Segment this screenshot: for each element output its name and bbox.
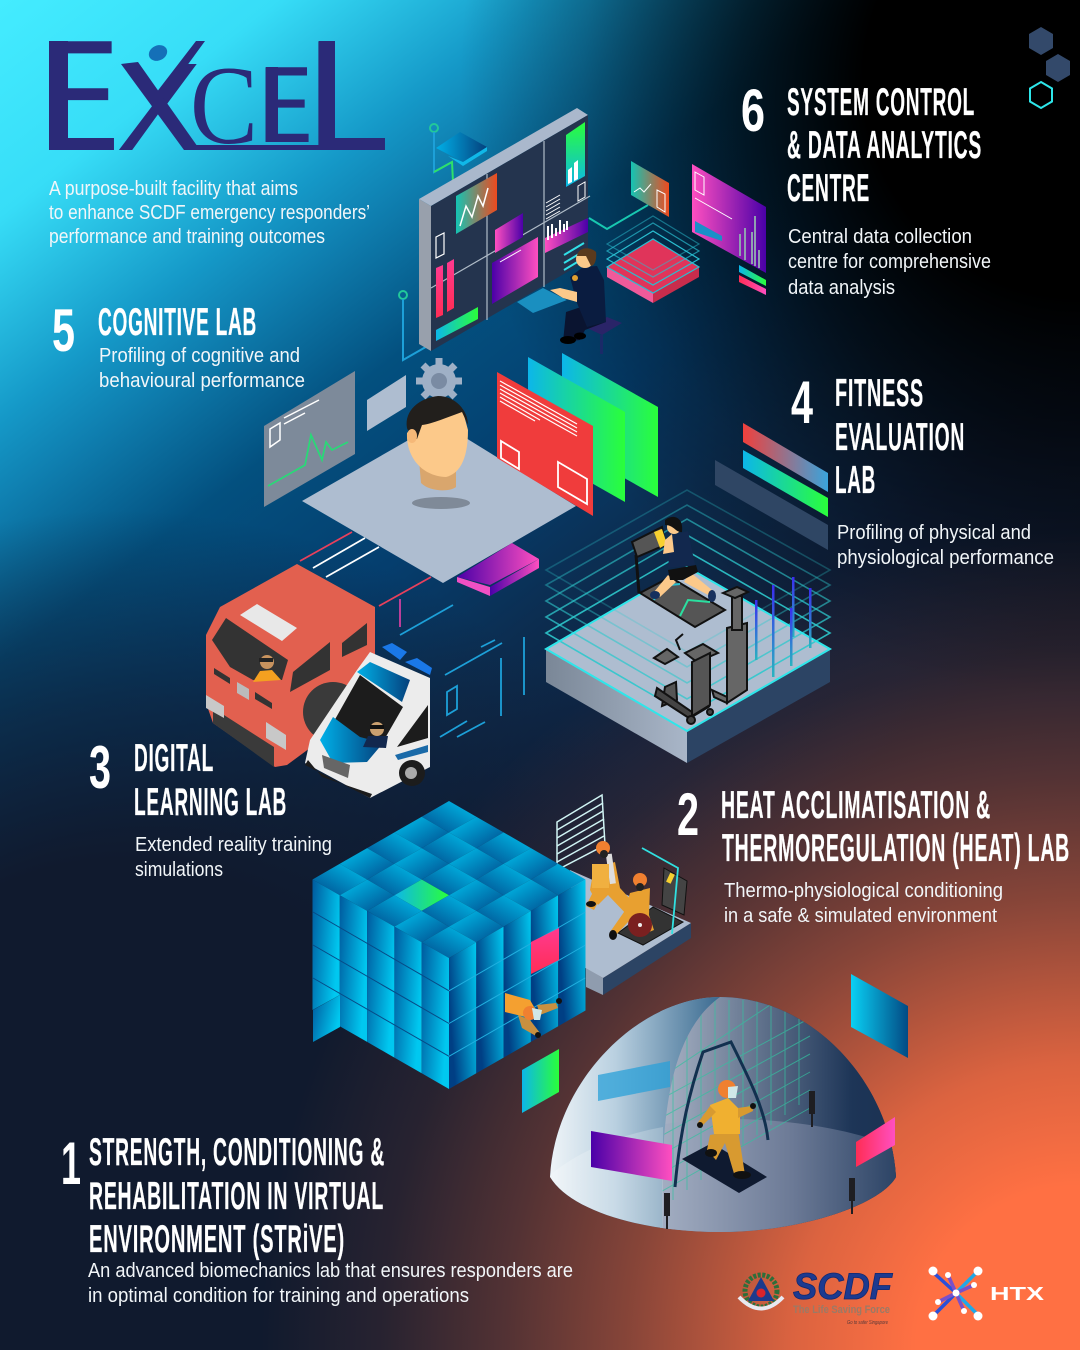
section 6 label: CENTRE: [787, 167, 870, 210]
wall of screens: [419, 108, 590, 351]
section 4 label: [791, 369, 1054, 569]
section 5 label: behavioural performance: [99, 370, 305, 392]
illustration: fitness evaluation lab: [546, 423, 830, 763]
intro text: [49, 178, 370, 248]
section 3 label: DIGITAL: [134, 737, 214, 780]
illustration: biomechanics dome: [530, 974, 908, 1240]
section 6 label: [741, 77, 991, 299]
icon: gear: [416, 358, 462, 404]
illustration: system control centre: [399, 108, 766, 360]
logo: SCDF: SCDF: [793, 1266, 893, 1307]
section 5 label: [52, 297, 305, 392]
logo: EXCEL: [41, 8, 390, 184]
cube left face: [312, 880, 449, 1089]
logo: EXCEL: E: [259, 44, 312, 166]
cube right face: [449, 880, 586, 1089]
logo: HTX: HTX: [990, 1284, 1044, 1304]
section 4 label: physiological performance: [837, 547, 1054, 569]
illustration: digital learning lab vehicles: [206, 564, 432, 798]
illustration: STRiVE cube: [312, 801, 586, 1113]
section 4 label: Profiling of physical and: [837, 522, 1031, 544]
dome interior: [550, 997, 896, 1232]
section 5 label: 5: [52, 297, 75, 364]
section 4 label: FITNESS: [835, 372, 924, 415]
section 5 label: Profiling of cognitive and: [99, 345, 300, 367]
section 6 label: data analysis: [788, 277, 895, 299]
logo: SCDF: [739, 1266, 893, 1326]
section 3 label: simulations: [135, 859, 223, 881]
section 2 label: Thermo-physiological conditioning: [724, 880, 1003, 902]
logo: HTX: [928, 1266, 1044, 1320]
section 1 label: REHABILITATION IN VIRTUAL: [89, 1175, 384, 1218]
section 2 label: in a safe & simulated environment: [724, 905, 997, 927]
section 3 label: Extended reality training: [135, 834, 332, 856]
exercise bike: [654, 634, 718, 724]
section 3 label: 3: [89, 734, 111, 801]
section 1 label: 1: [61, 1130, 81, 1197]
section 1 label: STRENGTH, CONDITIONING &: [89, 1131, 385, 1174]
measurement tower: [712, 587, 748, 703]
section 2 label: 2: [677, 781, 699, 848]
analytics cards: [631, 161, 766, 295]
sensors: [664, 1091, 855, 1229]
section 1 label: [61, 1130, 573, 1307]
icon: hexagons: [1029, 27, 1070, 108]
logo: SCDF: Go to safer Singapore: [847, 1320, 888, 1326]
section 6 label: Central data collection: [788, 226, 972, 248]
logo: EXCEL: X: [116, 38, 202, 177]
section 5 label: COGNITIVE LAB: [98, 301, 257, 344]
cube top tiles: [312, 801, 586, 958]
operator figure: [550, 248, 622, 354]
ambulance: [305, 643, 432, 798]
intro text: to enhance SCDF emergency responders’: [49, 202, 370, 224]
illustration: cognitive lab: [264, 353, 658, 737]
firefighter in cube: [505, 993, 562, 1038]
firefighters: [586, 841, 654, 940]
section 1 label: in optimal condition for training and operations: [88, 1285, 469, 1307]
section 1 label: An advanced biomechanics lab that ensures responders are: [88, 1260, 573, 1282]
section 2 label: [677, 781, 1070, 927]
section 6 label: 6: [741, 77, 765, 144]
logo: EXCEL: E: [41, 8, 119, 184]
illustration: heat lab platform: [557, 795, 691, 995]
intro text: A purpose-built facility that aims: [49, 178, 298, 200]
logo: EXCEL: L: [306, 8, 390, 184]
section 6 label: centre for comprehensive: [788, 251, 991, 273]
logo: SCDF: The Life Saving Force: [793, 1304, 890, 1316]
section 1 label: ENVIRONMENT (STRiVE): [89, 1218, 345, 1261]
section 3 label: [89, 734, 332, 881]
red panel: [497, 372, 593, 516]
intro text: performance and training outcomes: [49, 226, 325, 248]
treadmill and runner: [632, 517, 725, 627]
logo: EXCEL: C: [190, 44, 258, 168]
section 4 label: 4: [791, 369, 813, 436]
section 4 label: LAB: [835, 459, 876, 502]
fire truck: [206, 564, 375, 767]
section 3 label: LEARNING LAB: [134, 781, 287, 824]
head: [407, 396, 468, 490]
data platform: [607, 216, 699, 303]
firefighter on mat: [697, 1080, 756, 1179]
